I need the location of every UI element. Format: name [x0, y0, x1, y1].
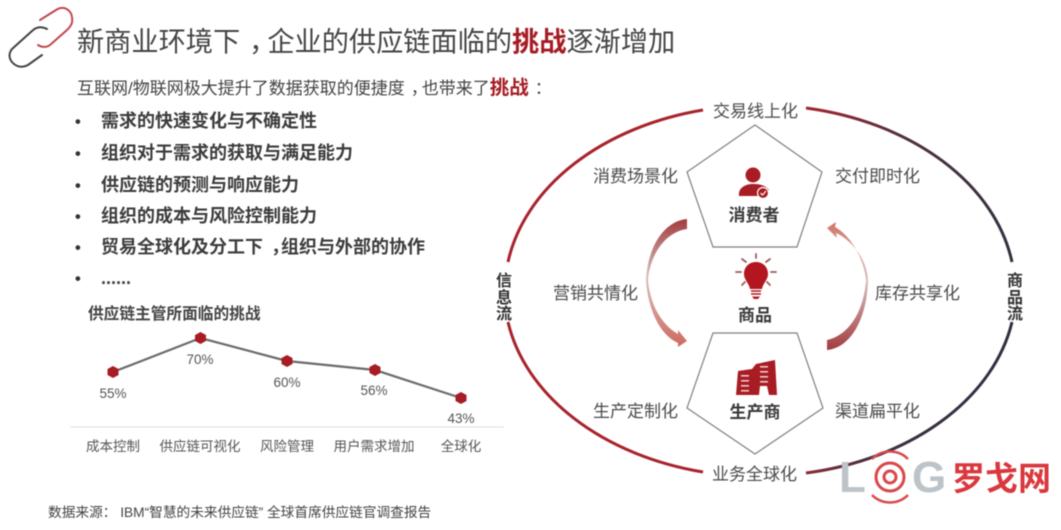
- pentagon: consumer: [687, 125, 822, 247]
- title: 新商业环境下 ，企业的供应链面临的挑战逐渐增加: [77, 26, 675, 57]
- line chart: 成本控制: [86, 439, 140, 454]
- footer source: 数据来源： IBM“智慧的未来供应链” 全球首席供应链官调查报告: [48, 504, 431, 520]
- icon: chain link: [10, 8, 72, 67]
- outer ring: goods flow lower arc: [806, 322, 1012, 473]
- line chart: 供应链可视化: [160, 438, 240, 454]
- bullet list: •: [75, 145, 81, 163]
- label: goods flow: 商: [1007, 272, 1023, 290]
- label: goods: 商品: [738, 306, 772, 325]
- subtitle text: 互联网/物联网极大提升了数据获取的便捷度 ，也带来了挑战 ：: [77, 77, 552, 99]
- label: consumer: 消费者: [728, 206, 780, 225]
- label: producer: 生产商: [730, 403, 780, 422]
- icon: producer: [736, 360, 777, 395]
- bullet list: •: [75, 208, 81, 226]
- node labels: 消费场景化: [593, 167, 678, 186]
- node labels: 生产定制化: [593, 402, 678, 421]
- label: goods flow: 品: [1007, 290, 1023, 307]
- label: goods flow: [1007, 272, 1023, 323]
- logo: LOG watermark: L: [839, 453, 866, 502]
- bullet list: •: [75, 113, 81, 131]
- bullet list: 组织的成本与风险控制能力: [101, 205, 317, 226]
- arrow: consumer to producer: [646, 219, 687, 347]
- node labels: 业务全球化: [712, 465, 797, 484]
- bullet list: 供应链的预测与响应能力: [101, 174, 299, 195]
- bullet list: 贸易全球化及分工下 ，组织与外部的协作: [101, 236, 425, 257]
- node labels: 渠道扁平化: [835, 402, 920, 421]
- bullet list: •: [75, 177, 81, 195]
- pentagon: producer: [687, 333, 823, 454]
- label: information flow: 息: [496, 288, 512, 307]
- line chart: [70, 332, 504, 454]
- bullet list: •: [75, 239, 81, 257]
- line chart: 风险管理: [260, 439, 314, 454]
- line chart: 55%: [99, 386, 127, 401]
- label: goods flow: 流: [1007, 304, 1023, 323]
- chart title: 供应链主管所面临的挑战: [88, 304, 261, 323]
- icon: consumer: [739, 168, 769, 198]
- logo: LOG watermark: 罗戈网: [952, 460, 1051, 497]
- bullet list: [75, 110, 425, 288]
- outer ring: goods flow arc: [806, 108, 1012, 262]
- label: information flow: 信: [496, 272, 512, 290]
- bullet list: 组织对于需求的获取与满足能力: [101, 142, 353, 163]
- icon: light bulb: [736, 254, 776, 299]
- line chart: 70%: [186, 352, 214, 367]
- outer ring: information flow arc: [508, 110, 703, 472]
- bullet list: •: [75, 270, 81, 288]
- line chart: 56%: [360, 383, 388, 398]
- line chart: 用户需求增加: [334, 438, 414, 454]
- node labels: 交易线上化: [713, 102, 798, 121]
- bullet list: 需求的快速变化与不确定性: [101, 110, 317, 131]
- node labels: 营销共情化: [553, 284, 638, 303]
- bullet list: ......: [101, 268, 131, 288]
- logo: LOG watermark: [839, 452, 1051, 502]
- node labels: 交付即时化: [835, 167, 920, 186]
- node labels: 库存共享化: [875, 284, 960, 303]
- line chart: 全球化: [441, 438, 481, 454]
- label: information flow: [496, 272, 512, 323]
- label: information flow: 流: [496, 304, 512, 323]
- logo: LOG watermark: G: [912, 453, 946, 502]
- line chart: 60%: [273, 375, 301, 390]
- node labels: [553, 102, 960, 484]
- line chart: 43%: [447, 411, 475, 426]
- arrow: producer to consumer: [827, 222, 868, 350]
